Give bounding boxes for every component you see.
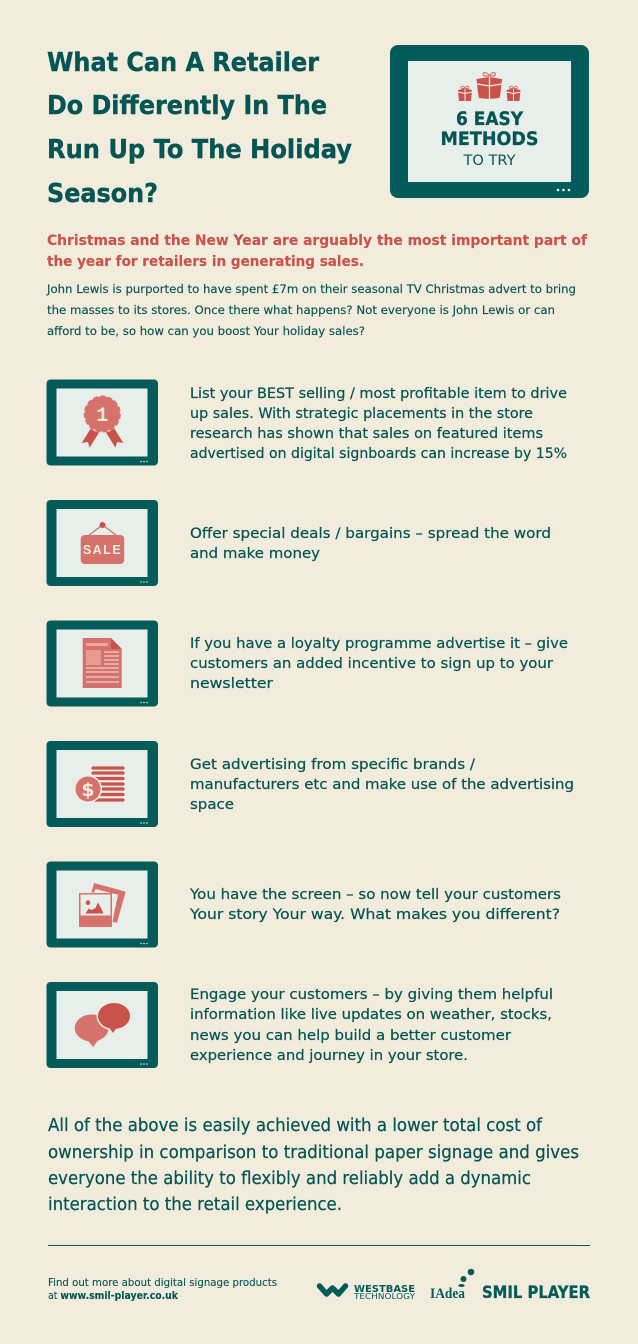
footer text: at www.smil-player.co.uk xyxy=(48,1290,179,1302)
panel: method 5 story xyxy=(46,862,561,948)
panel: method 1 best seller xyxy=(46,380,567,466)
subheading: the year for retailers in generating sales. xyxy=(47,254,364,270)
text: method 1: List your BEST selling / most profitable item to drive xyxy=(190,386,567,402)
text: method 1: up sales. With strategic placements in the store xyxy=(190,406,533,422)
title: Season? xyxy=(47,179,158,209)
text: method 2: and make money xyxy=(190,546,320,562)
logo: IAdea xyxy=(430,1269,474,1302)
text: method 5: Your story Your way. What makes you different? xyxy=(189,907,560,923)
intro text xyxy=(46,282,576,338)
closing statement: ownership in comparison to traditional paper signage and gives xyxy=(48,1142,579,1163)
text: method 3: customers an added incentive to sign up to your xyxy=(190,656,553,672)
subheading xyxy=(47,233,588,270)
footer text: Find out more about digital signage products xyxy=(48,1277,277,1289)
icon: screen with photos xyxy=(46,862,158,948)
icon: screen with speech bubbles xyxy=(46,982,158,1068)
intro text: the masses to its stores. Once there what happens? Not everyone is John Lewis or can xyxy=(47,303,555,317)
footer text xyxy=(48,1277,277,1302)
logo: IAdea: IAdea xyxy=(430,1286,465,1302)
text: method 3: If you have a loyalty programme advertise it – give xyxy=(190,636,568,652)
subheading: Christmas and the New Year are arguably the most important part of xyxy=(47,233,588,249)
text: method 5: You have the screen – so now tell your customers xyxy=(189,887,561,903)
text: method 3 xyxy=(190,636,568,692)
title: Run Up To The Holiday xyxy=(47,135,352,165)
icon: gift boxes xyxy=(458,73,520,101)
heading: 6 easy methods: TO TRY xyxy=(462,153,516,169)
logo: Westbase Technology: WESTBASE xyxy=(354,1284,415,1295)
text: method 2: Offer special deals / bargains – spread the word xyxy=(190,526,551,542)
icon: screen with sale sign: SALE xyxy=(83,543,122,557)
text: method 5 xyxy=(189,887,561,923)
text: method 6: experience and journey in your store. xyxy=(190,1048,468,1064)
heading: 6 easy methods: 6 EASY xyxy=(456,109,524,130)
heading: 6 easy methods xyxy=(440,109,538,169)
panel: method 4 brands xyxy=(46,741,574,827)
intro text: John Lewis is purported to have spent £7m on their seasonal TV Christmas advert to bring xyxy=(46,282,576,296)
panel: 6 easy methods screen xyxy=(390,45,589,198)
text: method 4: manufacturers etc and make use of the advertising xyxy=(190,777,574,793)
panel: method 3 loyalty xyxy=(46,620,568,706)
title xyxy=(47,48,352,209)
panel: method 6 engage xyxy=(46,982,553,1068)
icon: screen with rosette xyxy=(46,380,158,466)
logo: SMIL Player: SMIL PLAYER xyxy=(482,1283,590,1303)
text: method 4: space xyxy=(190,797,234,813)
title: Do Differently In The xyxy=(47,91,327,121)
text: method 4: Get advertising from specific brands / xyxy=(190,757,475,773)
text: method 3: newsletter xyxy=(190,676,273,692)
logo: Westbase Technology: TECHNOLOGY xyxy=(353,1292,415,1301)
icon: screen with coins: $ xyxy=(81,779,95,801)
title: What Can A Retailer xyxy=(47,48,319,78)
text: method 6: information like live updates on weather, stocks, xyxy=(190,1007,552,1023)
closing statement: interaction to the retail experience. xyxy=(48,1194,342,1215)
text: method 1: advertised on digital signboards can increase by 15% xyxy=(190,446,567,462)
text: method 1 xyxy=(190,386,567,462)
closing statement xyxy=(48,1115,579,1215)
heading: 6 easy methods: METHODS xyxy=(440,129,538,150)
panel: method 2 deals xyxy=(46,500,551,586)
text: method 6: news you can help build a better customer xyxy=(190,1028,511,1044)
text: method 6 xyxy=(190,987,553,1064)
text: method 1: research has shown that sales on featured items xyxy=(190,426,543,442)
text: method 6: Engage your customers – by giving them helpful xyxy=(190,987,553,1003)
icon: screen with document xyxy=(46,620,158,706)
text: method 4 xyxy=(190,757,574,813)
icon: screen with sale sign xyxy=(46,500,158,586)
icon: screen with coins xyxy=(46,741,158,827)
closing statement: All of the above is easily achieved with a lower total cost of xyxy=(48,1115,543,1136)
text: method 2 xyxy=(190,526,551,562)
icon: screen with rosette: 1 xyxy=(96,405,108,428)
intro text: afford to be, so how can you boost Your holiday sales? xyxy=(47,324,365,338)
logo: Westbase Technology xyxy=(320,1284,415,1301)
closing statement: everyone the ability to flexibly and reliably add a dynamic xyxy=(48,1168,531,1189)
